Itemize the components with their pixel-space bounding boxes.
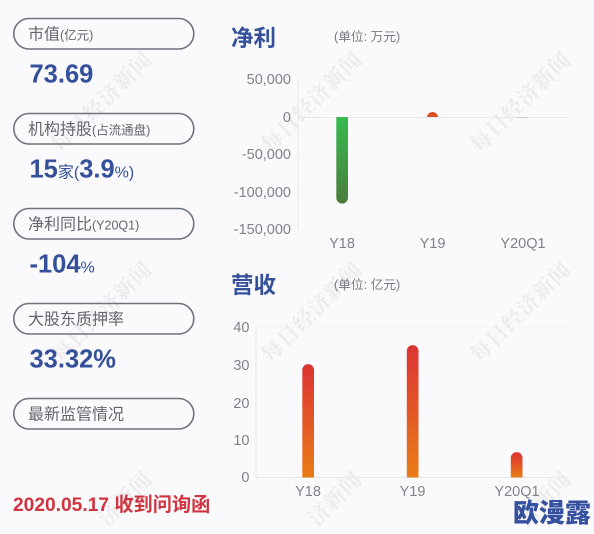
bar chart: net profit: -100,000 bbox=[234, 185, 291, 201]
bar chart: net profit: Y19 bbox=[420, 236, 445, 252]
panel: net profit year on year: -104% bbox=[30, 250, 95, 278]
panel: market value bbox=[14, 18, 194, 88]
text: 济新闻 bbox=[304, 467, 367, 530]
text: 每日经济新闻 bbox=[466, 257, 576, 367]
bar chart: revenue: 20 bbox=[233, 396, 250, 412]
bar chart: net profit: Y20Q1 bbox=[500, 236, 546, 252]
panel: institutional holdings: 15家(3.9%) bbox=[30, 156, 134, 184]
bar chart: revenue bbox=[233, 320, 568, 500]
text: revenue unit: (单位: 亿元) bbox=[334, 278, 400, 292]
bar: Y18 bbox=[336, 117, 348, 204]
watermark label: bottom right brand: 欧漫露 bbox=[513, 493, 591, 530]
bar chart: revenue: 0 bbox=[241, 470, 250, 486]
bar: Y20Q1 bbox=[511, 452, 522, 478]
panel: net profit year on year bbox=[14, 208, 194, 278]
heading: net profit: 净利 bbox=[231, 26, 276, 51]
text: net profit unit: (单位: 万元) bbox=[334, 30, 400, 44]
bar: Y20Q1 bbox=[517, 116, 528, 118]
text: 每日经济新闻 bbox=[466, 47, 576, 157]
heading: revenue: 营收 bbox=[231, 273, 276, 298]
text: 每日经济新闻 bbox=[47, 47, 157, 157]
bar chart: net profit: -50,000 bbox=[242, 147, 291, 163]
bar chart: revenue: Y18 bbox=[295, 484, 321, 500]
panel: institutional holdings bbox=[14, 114, 194, 184]
callout: inquiry letter date: 2020.05.17 收到问询函 bbox=[13, 494, 210, 516]
bar chart: net profit: 50,000 bbox=[247, 72, 291, 88]
bar chart: revenue: 40 bbox=[233, 320, 250, 336]
panel: major shareholder pledge ratio bbox=[14, 304, 194, 374]
panel: major shareholder pledge ratio: 大股东质押率 bbox=[28, 310, 124, 328]
text: 每日经济新闻 bbox=[257, 47, 367, 157]
bar chart: net profit: -150,000 bbox=[234, 222, 291, 238]
bar chart: revenue: Y20Q1 bbox=[494, 484, 540, 500]
bar chart: revenue: Y19 bbox=[400, 484, 425, 500]
text: 每日经济新闻 bbox=[47, 257, 157, 367]
bar chart: revenue: 30 bbox=[233, 358, 250, 374]
bar: Y19 bbox=[407, 345, 418, 478]
bar: Y19 bbox=[427, 112, 438, 118]
bar chart: net profit: Y18 bbox=[329, 236, 355, 252]
text: 每日经济新闻 bbox=[257, 257, 367, 367]
text: 济新闻 bbox=[513, 467, 576, 530]
panel: market value: 市值(亿元) bbox=[28, 26, 93, 44]
bar chart: net profit: 0 bbox=[283, 110, 291, 126]
bar: Y18 bbox=[302, 364, 314, 478]
panel: latest regulatory status: 最新监管情况 bbox=[28, 406, 124, 424]
panel: net profit year on year: 净利同比(Y20Q1) bbox=[28, 216, 139, 234]
bar chart: net profit bbox=[234, 72, 568, 252]
panel: major shareholder pledge ratio: 33.32% bbox=[30, 346, 116, 374]
panel: latest regulatory status bbox=[14, 398, 194, 429]
panel: market value: 73.69 bbox=[30, 60, 93, 88]
panel: institutional holdings: 机构持股(占流通盘) bbox=[28, 120, 150, 138]
bar chart: revenue: 10 bbox=[233, 433, 250, 449]
text: 济新闻 bbox=[94, 467, 157, 530]
